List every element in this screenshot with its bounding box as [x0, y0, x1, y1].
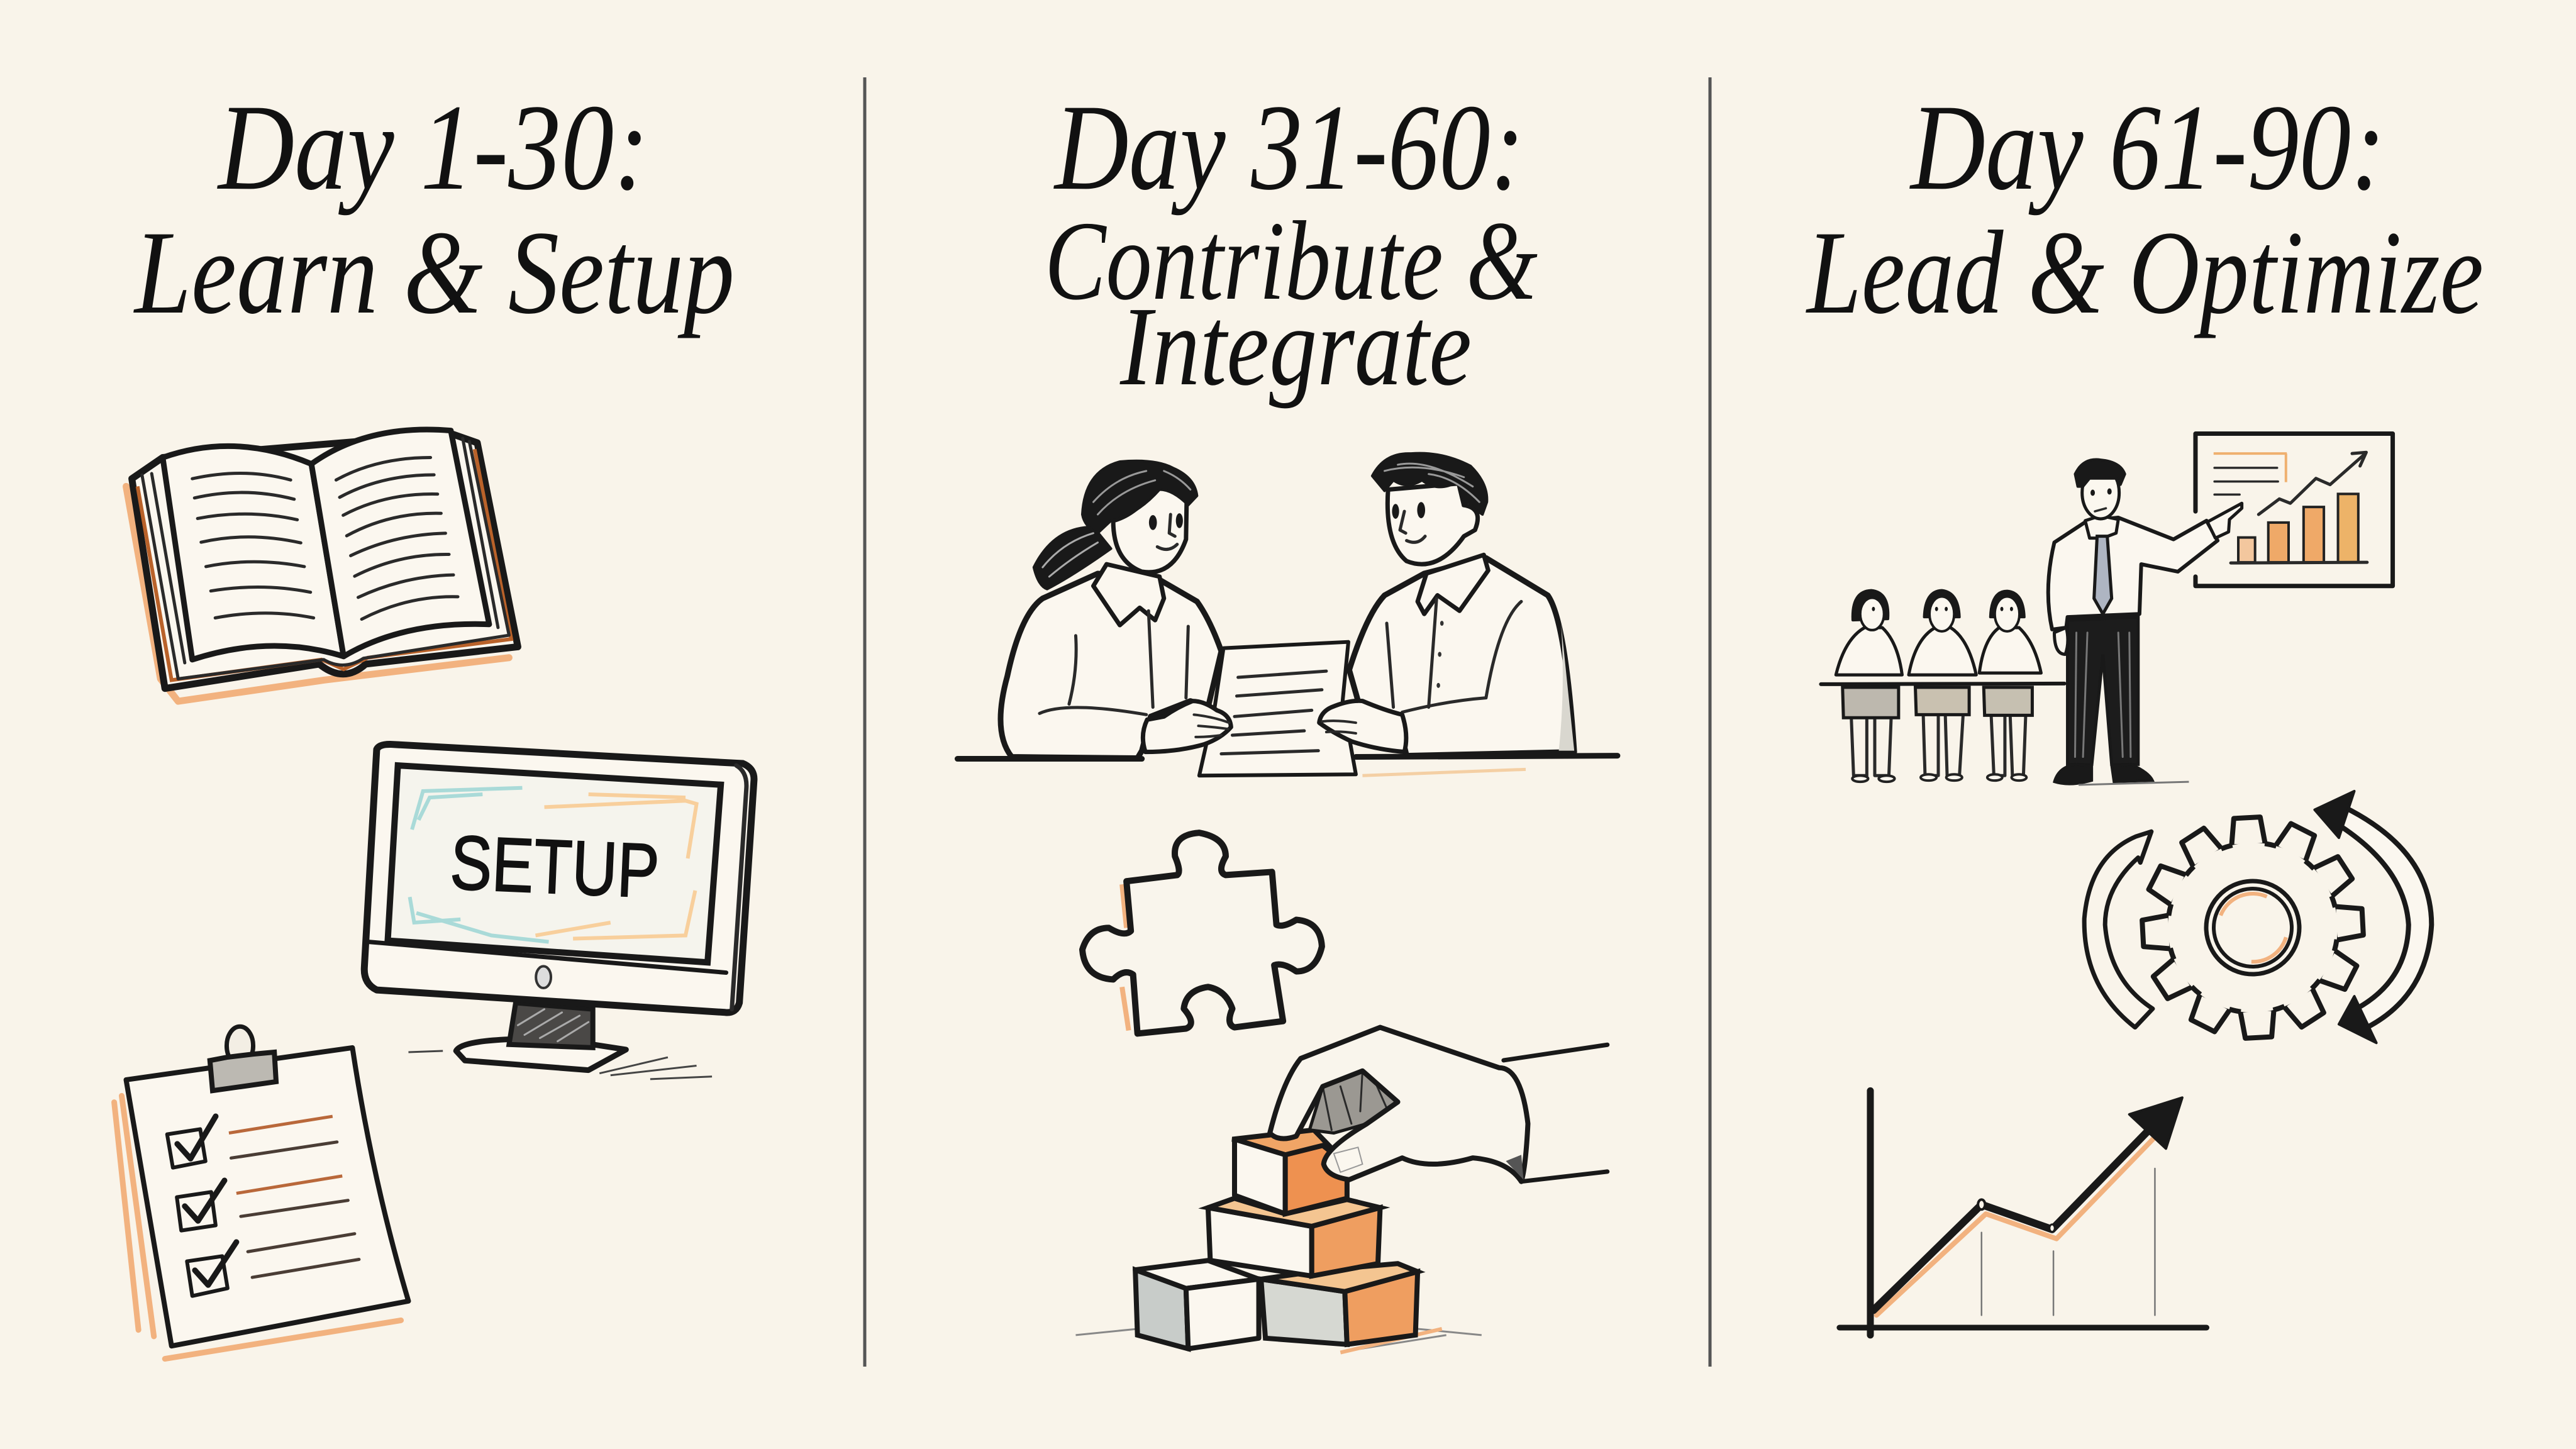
woman: [1001, 461, 1221, 758]
man's hand: [1319, 701, 1406, 752]
heading: Day 61-90 Lead & Optimize: [1806, 79, 2484, 339]
icon: open book: [126, 430, 518, 701]
top block: [1232, 1130, 1347, 1214]
heading: Day 31-60 Contribute & Integrate: Contribute &: [1045, 198, 1538, 323]
chart: rising line with arrow: [1840, 1091, 2207, 1335]
illustration: presenter with team and chart board: [1821, 434, 2393, 785]
panel: Day 31-60: [957, 79, 1618, 1353]
heading: Day 1-30 Learn & Setup: Day 1-30:: [216, 79, 649, 216]
heading: Day 1-30 Learn & Setup: Learn & Setup: [133, 207, 735, 339]
table and document: [957, 642, 1618, 775]
icon: checklist on clipboard: [114, 1026, 408, 1359]
heading: Day 31-60 Contribute & Integrate: [1045, 79, 1538, 409]
presenter: [2048, 460, 2242, 784]
panel: Day 61-90: [1806, 79, 2484, 1335]
heading: Day 31-60 Contribute & Integrate: Day 31-60:: [1053, 79, 1524, 216]
icon: puzzle piece: [1082, 833, 1322, 1033]
icon: gear with rotation arrows: [2084, 791, 2431, 1043]
heading: Day 31-60 Contribute & Integrate: Integrate: [1119, 284, 1472, 409]
hand: [1270, 1028, 1607, 1182]
man: [1349, 453, 1574, 756]
icon: monitor with SETUP screen: [364, 744, 754, 1079]
illustration: two colleagues reviewing a document: [957, 453, 1618, 775]
board with bar chart: [2196, 434, 2393, 586]
heading: Day 1-30 Learn & Setup: [133, 79, 735, 339]
woman's hand: [1143, 701, 1231, 752]
seated team: [1821, 591, 2189, 785]
icon: monitor with SETUP screen: SETUP: [448, 819, 661, 914]
heading: Day 61-90 Lead & Optimize: Day 61-90:: [1909, 79, 2385, 216]
lower blocks: [1135, 1198, 1418, 1349]
panel: Day 1-30: [114, 79, 754, 1359]
icon: hand placing building blocks: [1075, 1028, 1607, 1353]
